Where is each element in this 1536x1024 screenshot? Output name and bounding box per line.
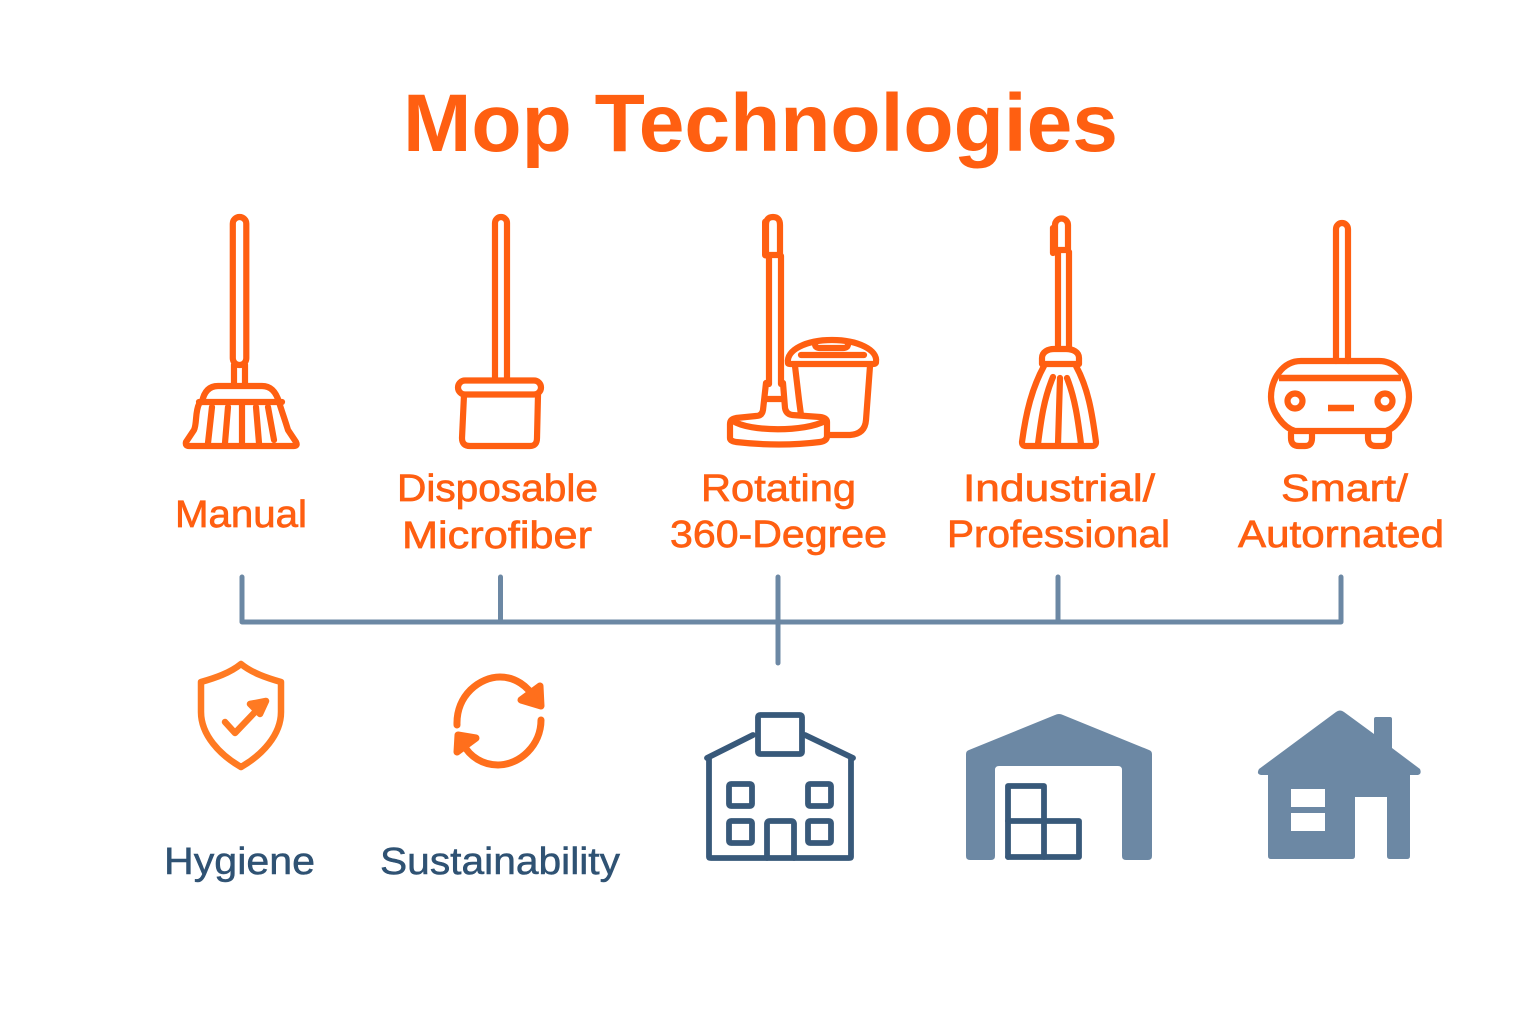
title: Mop Technologies	[403, 78, 1118, 169]
label: Rotating 360-Degree: Rotating	[701, 468, 856, 510]
label: Disposable Microfiber: Microfiber	[402, 515, 592, 557]
label: Smart/Autornated: Smart/	[1281, 468, 1408, 510]
label: Industrial/Professional	[947, 468, 1170, 556]
label: Hygiene: Hygiene	[164, 841, 315, 883]
icon: smart automated mop robot	[1271, 223, 1409, 446]
label: Disposable Microfiber	[397, 468, 598, 557]
label: Rotating 360-Degree	[670, 468, 887, 556]
icon: warehouse with boxes	[966, 714, 1152, 860]
icon: industrial professional mop	[1022, 219, 1096, 446]
label: Manual: Manual	[175, 494, 307, 536]
label: Smart/Autornated: Autornated	[1238, 514, 1444, 556]
label: Rotating 360-Degree: 360-Degree	[670, 514, 887, 556]
label: Disposable Microfiber: Disposable	[397, 468, 598, 510]
connector tree	[242, 577, 1341, 663]
label: Smart/Autornated	[1238, 468, 1444, 556]
icon: house	[1258, 710, 1421, 859]
label: Industrial/Professional: Professional	[947, 514, 1170, 556]
icon: multi-storey building	[707, 715, 853, 858]
icon: manual broom mop	[186, 217, 297, 446]
label: Sustainability: Sustainability	[380, 841, 620, 883]
icon: disposable microfiber mop	[458, 217, 541, 446]
icon: rotating 360-degree mop and bucket	[730, 217, 876, 444]
icon: hygiene shield	[201, 664, 281, 767]
icon: sustainability cycle arrows	[457, 677, 541, 765]
label: Industrial/Professional: Industrial/	[963, 468, 1156, 510]
